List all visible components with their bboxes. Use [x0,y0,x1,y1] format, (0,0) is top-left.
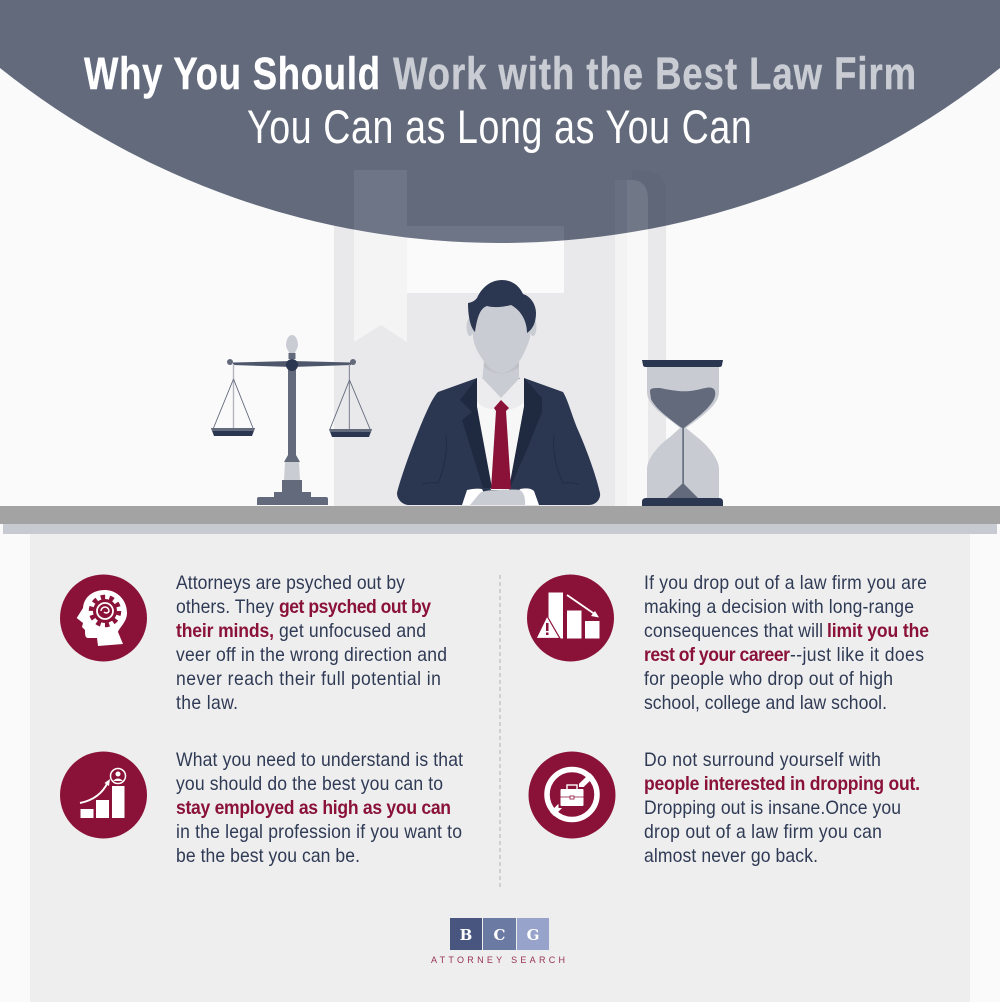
text: psyched out: the law. [176,691,238,713]
text: surroundings: Dropping out is insane.Once you [644,796,901,818]
text: dropping out consequences: rest of your career [644,643,790,665]
title [84,48,916,154]
logo: BCG Attorney Search: G [527,926,539,944]
necktie [491,400,511,489]
icon: head with gear [60,574,147,662]
logo: BCG Attorney Search: C [494,926,506,944]
logo: BCG Attorney Search: B [460,926,472,944]
header arc [0,0,1000,243]
hair [468,280,536,333]
content panel [30,534,970,1002]
shirt [477,378,524,490]
text: dropping out consequences: for people who drop out of high [644,667,893,689]
text: surroundings [644,748,920,866]
text: psyched out [176,571,447,713]
text: psyched out: Attorneys are psyched out by [176,571,406,593]
neck [482,360,519,398]
text: surroundings: drop out of a law firm you can [644,820,882,842]
title: You Can as Long as You Can [247,101,752,154]
icon: falling bars with warning [527,574,614,662]
logo: BCG Attorney Search [431,918,565,965]
text: dropping out consequences: making a decision with long-range [644,595,914,617]
logo: BCG Attorney Search: ATTORNEY SEARCH [431,955,565,965]
hands and cuffs [462,488,539,505]
text: surroundings: Do not surround yourself with [644,748,881,770]
head and ears [466,318,474,336]
text: surroundings: almost never go back. [644,844,818,866]
text: stay employed [176,748,464,866]
text: dropping out consequences: --just like it does [790,643,924,665]
text: dropping out consequences: consequences that will [644,619,823,641]
suit [397,378,600,505]
icon: rising bars with person [60,752,147,838]
text: psyched out: get psyched out by [279,595,432,617]
title: Why You Should [84,48,380,99]
icon: no briefcase [528,752,616,838]
text: stay employed: What you need to understand is that [176,748,464,770]
text: dropping out consequences: limit you the [827,619,929,641]
text: surroundings: people interested in dropping out. [644,772,920,794]
text: psyched out: get unfocused and [279,619,426,641]
attorney figure [397,280,600,505]
hourglass [642,360,723,506]
suit creases [422,435,579,485]
desk [0,506,1000,534]
text: psyched out: their minds, [176,619,274,641]
text: stay employed: stay employed as high as you can [176,796,451,818]
text: stay employed: you should do the best you can to [176,772,443,794]
text: psyched out: never reach their full potential in [176,667,441,689]
text: stay employed: be the best you can be. [176,844,360,866]
text: psyched out: veer off in the wrong direction and [176,643,447,665]
scales of justice [211,335,372,505]
text: psyched out: others. They [176,595,275,617]
title: Work with the Best Law Firm [393,48,916,99]
text: stay employed: in the legal profession if you want to [176,820,462,842]
book showing through header arc [354,170,648,243]
column divider [499,575,501,888]
text: dropping out consequences: If you drop out of a law firm you are [644,571,927,593]
text: dropping out consequences: school, college and law school. [644,691,887,713]
lapels [460,378,492,488]
background book illustration [334,170,666,506]
text: dropping out consequences [644,571,929,713]
